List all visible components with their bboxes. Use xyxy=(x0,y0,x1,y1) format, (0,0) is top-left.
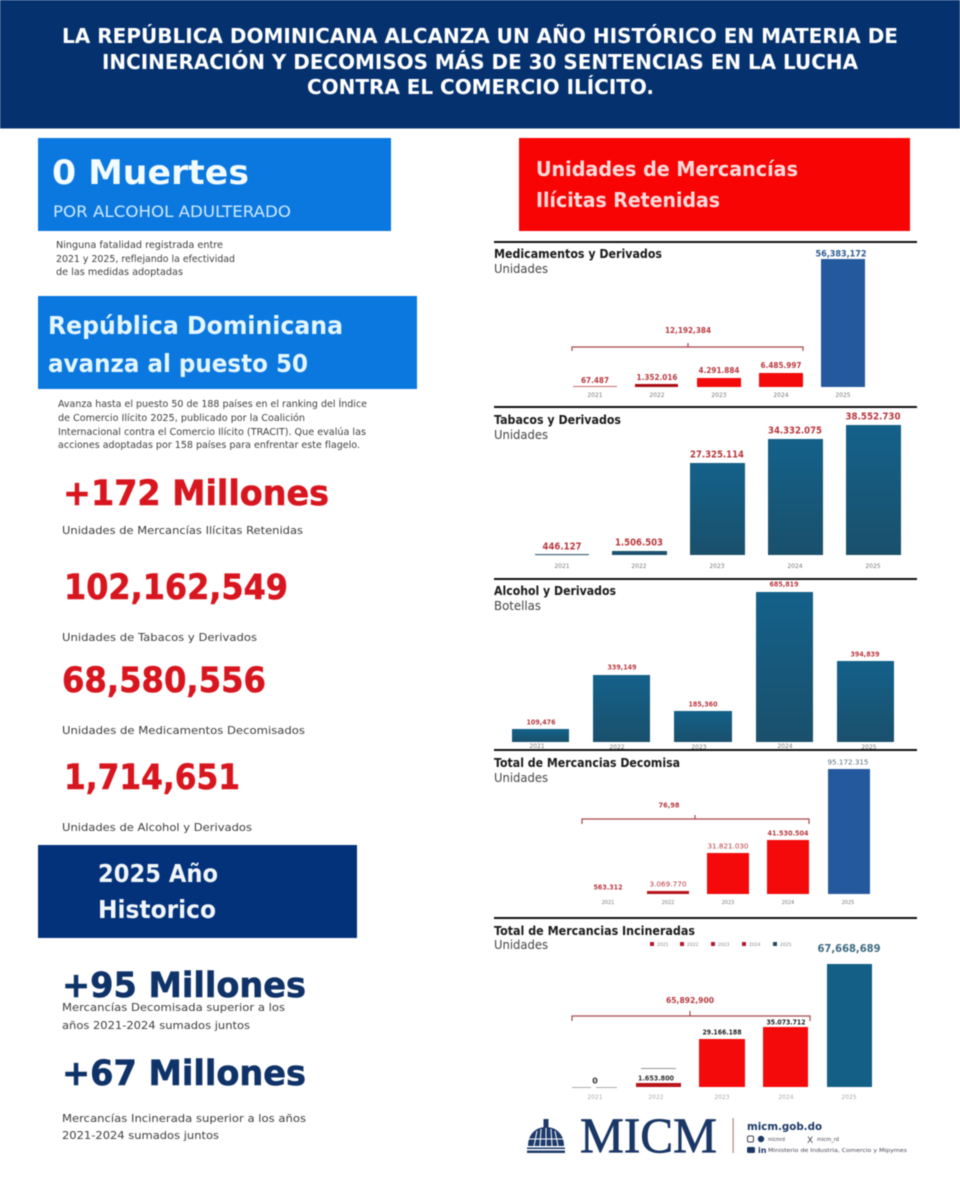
chart: medicamentos y derivados: 2021 xyxy=(587,392,603,399)
chart: tabacos y derivados: 1.506.503 xyxy=(615,538,663,548)
chart: tabacos y derivados: 2023 xyxy=(709,563,725,570)
chart: medicamentos y derivados xyxy=(494,241,917,399)
text block: ranking: de Comercio Ilícito 2025, publicado por la Coalición xyxy=(58,412,305,424)
chart: total de mercancias incineradas: 2024 xyxy=(778,1094,794,1101)
chart: alcohol y derivados: 2022 xyxy=(609,744,625,751)
icon: dome xyxy=(527,1119,565,1153)
chart: total de mercancias decomisadas: 2025 xyxy=(842,900,854,906)
chart: total de mercancias incineradas: 2021 xyxy=(587,1094,603,1101)
title: CONTRA EL COMERCIO ILÍCITO. xyxy=(307,75,654,99)
chart: total de mercancias decomisadas: 41.530.504 xyxy=(768,830,809,838)
text block: ranking: acciones adoptadas por 158 países para enfrentar este flagelo. xyxy=(58,439,360,451)
heading: 2025 año historico: Historico xyxy=(98,895,216,924)
text block: ninguna fatalidad: de las medidas adoptadas xyxy=(56,267,183,278)
panel: 0 muertes xyxy=(38,138,391,231)
chart: medicamentos y derivados: 2025 xyxy=(835,392,851,399)
chart: total de mercancias incineradas: 1.653.800 xyxy=(638,1074,674,1082)
chart: medicamentos y derivados: 67.487 xyxy=(581,376,609,385)
chart: medicamentos y derivados: Medicamentos y Derivados xyxy=(494,247,662,261)
chart legend: 2023 xyxy=(718,942,730,948)
chart: total de mercancias decomisadas: Unidades xyxy=(494,771,548,785)
text block: ranking: Avanza hasta el puesto 50 de 188 países en el ranking del Índice xyxy=(58,397,367,410)
stat: medicamentos: 68,580,556 xyxy=(62,661,266,701)
heading: 2025 año historico xyxy=(98,859,218,924)
stat: alcohol: Unidades de Alcohol y Derivados xyxy=(62,821,252,834)
heading: república dominicana: República Dominicana xyxy=(48,311,343,340)
chart: medicamentos y derivados: 1.352.016 xyxy=(636,373,678,382)
stat: alcohol xyxy=(62,758,252,834)
contact: social handles: Ministerio de Industria, Comercio y Mipymes xyxy=(768,1148,907,1154)
chart: alcohol y derivados xyxy=(494,578,917,751)
stat: alcohol: 1,714,651 xyxy=(64,758,240,798)
panel: unidades de mercancías ilícitas retenidas xyxy=(519,138,910,231)
chart: total de mercancias incineradas: 0 xyxy=(592,1076,598,1086)
chart: total de mercancias incineradas: Total de Mercancias Incineradas xyxy=(494,924,695,938)
text block: ninguna fatalidad xyxy=(56,240,235,278)
chart: medicamentos y derivados: 6.485.997 xyxy=(760,361,802,370)
stat: +67 millones: +67 Millones xyxy=(62,1054,306,1094)
contact: social handles xyxy=(747,1136,907,1155)
chart: medicamentos y derivados: 56,383,172 xyxy=(816,250,866,260)
chart: tabacos y derivados: 2022 xyxy=(631,563,647,570)
chart: total de mercancias incineradas xyxy=(494,917,917,1101)
text block: ninguna fatalidad: 2021 y 2025, reflejando la efectividad xyxy=(56,254,235,265)
logo: MICM footer xyxy=(527,1107,907,1163)
text block: ranking: Internacional contra el Comercio Ilícito (TRACIT). Que evalúa las xyxy=(58,426,366,438)
chart: total de mercancias incineradas: 2022 xyxy=(648,1094,664,1101)
contact: social handles: X xyxy=(807,1136,813,1146)
chart: total de mercancias decomisadas: Total de Mercancias Decomisa xyxy=(494,756,680,770)
stat: +172 millones: +172 Millones xyxy=(63,474,329,514)
chart: tabacos y derivados: 38.552.730 xyxy=(846,412,901,422)
panel: puesto 50 xyxy=(38,296,417,389)
chart: tabacos y derivados: 2025 xyxy=(865,563,881,570)
chart: tabacos y derivados: 2024 xyxy=(787,563,803,570)
chart: alcohol y derivados: 339,149 xyxy=(608,664,637,672)
wordmark: MICM xyxy=(580,1107,717,1163)
stat: +95 millones: +95 Millones xyxy=(62,966,306,1006)
stat: +95 millones: Mercancías Decomisada superior a los xyxy=(62,1001,285,1014)
stat: tabacos: 102,162,549 xyxy=(64,568,288,608)
chart: alcohol y derivados: 2023 xyxy=(691,744,707,751)
stat: +67 millones: 2021-2024 sumados juntos xyxy=(62,1129,219,1142)
chart: tabacos y derivados: Unidades xyxy=(494,428,548,442)
chart: total de mercancias incineradas: 2025 xyxy=(841,1094,857,1101)
heading: 0 muertes: 0 Muertes xyxy=(52,153,249,193)
chart: tabacos y derivados: 27.325.114 xyxy=(690,450,744,460)
chart: tabacos y derivados: Tabacos y Derivados xyxy=(494,413,621,427)
subheading: por alcohol adulterado: POR ALCOHOL ADULTERADO xyxy=(53,202,291,221)
chart: medicamentos y derivados: 2022 xyxy=(649,392,665,399)
chart: total de mercancias decomisadas: 563.312 xyxy=(594,884,623,892)
heading: unidades retenidas: Unidades de Mercancías xyxy=(536,157,798,181)
chart legend: 2024 xyxy=(749,942,761,948)
chart: alcohol y derivados: 2025 xyxy=(861,744,877,751)
chart: total de mercancias incineradas: Unidades xyxy=(494,938,548,952)
chart: alcohol y derivados: 109,476 xyxy=(526,718,556,726)
chart legend: 2025 xyxy=(780,942,792,948)
heading: unidades retenidas: Ilícitas Retenidas xyxy=(536,188,720,212)
contact: social handles: in xyxy=(758,1146,767,1155)
panel: 2025 año historico xyxy=(38,845,357,938)
chart: tabacos y derivados xyxy=(494,406,917,570)
stat: medicamentos: Unidades de Medicamentos Decomisados xyxy=(62,724,305,737)
stat: +67 millones xyxy=(62,1054,306,1142)
contact: social handles: micm_rd xyxy=(817,1137,839,1143)
chart: total de mercancias decomisadas: 2021 xyxy=(602,900,614,906)
chart legend xyxy=(650,942,792,948)
text block: ninguna fatalidad: Ninguna fatalidad registrada entre xyxy=(56,240,223,251)
chart: total de mercancias decomisadas: 76,98 xyxy=(658,802,680,810)
title: INCINERACIÓN Y DECOMISOS MÁS DE 30 SENTENCIAS EN LA LUCHA xyxy=(102,50,859,74)
chart: medicamentos y derivados: 2023 xyxy=(711,392,727,399)
contact: social handles: micmrd xyxy=(768,1137,785,1143)
chart: alcohol y derivados: 685,819 xyxy=(770,580,799,588)
chart: medicamentos y derivados: 2024 xyxy=(773,392,789,399)
chart: total de mercancias incineradas: 65,892,900 xyxy=(666,996,714,1005)
chart: alcohol y derivados: 2021 xyxy=(529,743,545,750)
title: LA REPÚBLICA DOMINICANA ALCANZA UN AÑO HISTÓRICO EN MATERIA DE xyxy=(62,24,898,48)
heading: república dominicana: avanza al puesto 50 xyxy=(48,349,308,378)
chart: total de mercancias decomisadas: 2024 xyxy=(782,900,794,906)
stat: +67 millones: Mercancías Incinerada superior a los años xyxy=(62,1112,306,1125)
stat: +172 millones: Unidades de Mercancías Ilícitas Retenidas xyxy=(62,524,303,537)
heading: 2025 año historico: 2025 Año xyxy=(98,859,218,888)
stat: +95 millones xyxy=(62,966,306,1032)
chart: total de mercancias decomisadas: 31.821.030 xyxy=(708,842,748,850)
stat: +95 millones: años 2021-2024 sumados juntos xyxy=(62,1019,250,1032)
chart: tabacos y derivados: 446.127 xyxy=(542,542,582,552)
heading: unidades retenidas xyxy=(536,157,798,212)
heading: república dominicana xyxy=(48,311,343,378)
chart: total de mercancias incineradas: 67,668,689 xyxy=(818,942,880,955)
chart: alcohol y derivados: 185,360 xyxy=(688,700,718,708)
stat: tabacos: Unidades de Tabacos y Derivados xyxy=(62,631,257,644)
chart: total de mercancias decomisadas: 2022 xyxy=(662,900,674,906)
chart: total de mercancias decomisadas: 2023 xyxy=(722,900,734,906)
chart: medicamentos y derivados: 4.291.884 xyxy=(698,366,740,375)
chart: total de mercancias decomisadas: 3.069.770 xyxy=(650,880,686,888)
chart: total de mercancias decomisadas: 95.172.315 xyxy=(828,758,868,766)
chart: total de mercancias incineradas: 35.073.712 xyxy=(766,1018,806,1026)
stat: tabacos xyxy=(62,568,288,644)
chart: alcohol y derivados: Alcohol y Derivados xyxy=(494,584,616,598)
title xyxy=(62,24,898,99)
contact: website: micm.gob.do xyxy=(747,1120,822,1133)
chart: alcohol y derivados: Botellas xyxy=(494,599,541,613)
chart: medicamentos y derivados: 12,192,384 xyxy=(665,326,711,335)
chart legend: 2021 xyxy=(657,942,669,948)
chart: tabacos y derivados: 2021 xyxy=(554,563,570,570)
chart: total de mercancias incineradas: 2023 xyxy=(714,1094,730,1101)
chart: total de mercancias incineradas: 29.166.188 xyxy=(702,1028,742,1036)
chart: alcohol y derivados: 2024 xyxy=(777,743,793,750)
stat: +172 millones xyxy=(62,474,329,537)
text block: ranking xyxy=(58,397,367,451)
chart legend: 2022 xyxy=(687,942,699,948)
chart: medicamentos y derivados: Unidades xyxy=(494,262,548,276)
chart: alcohol y derivados: 394,839 xyxy=(850,650,880,658)
chart: total de mercancias decomisadas xyxy=(494,749,917,906)
stat: medicamentos xyxy=(62,661,305,737)
chart: tabacos y derivados: 34.332.075 xyxy=(768,426,822,436)
header banner xyxy=(0,0,960,128)
